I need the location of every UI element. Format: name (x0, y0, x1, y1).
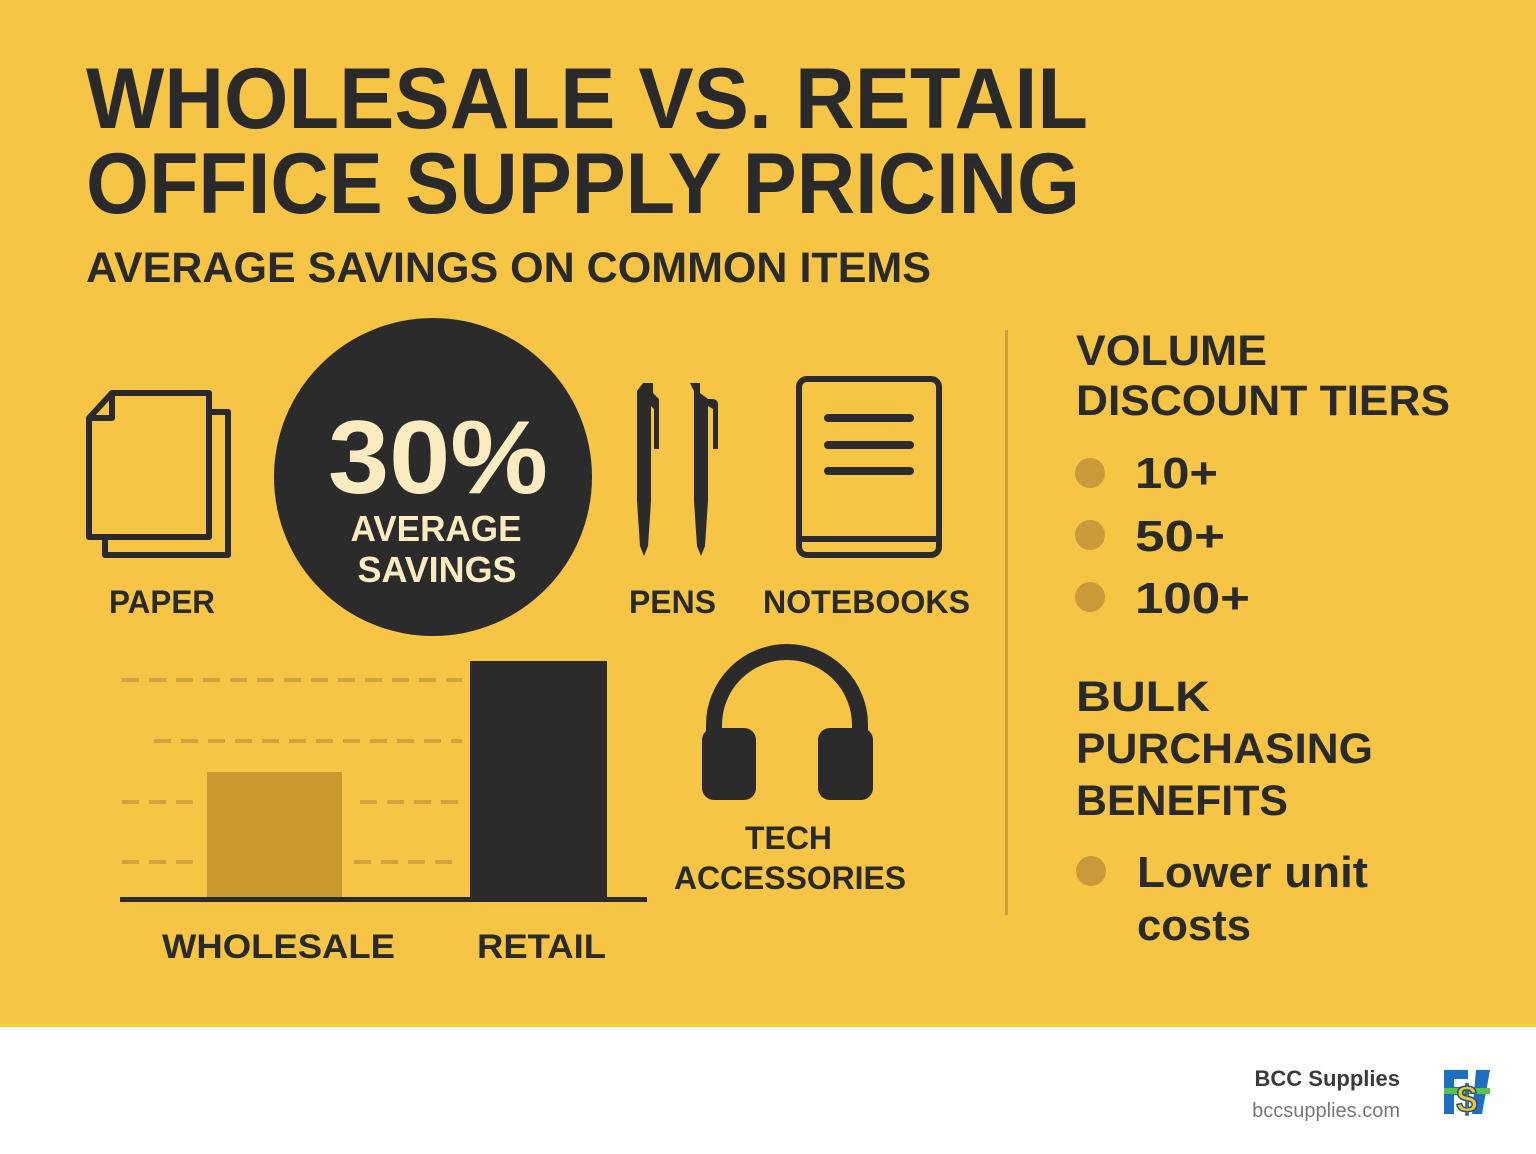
list: tiers: 100+ (1135, 574, 1250, 623)
bar: retail (470, 661, 607, 899)
footer brand: bccsupplies.com (1252, 1100, 1400, 1122)
heading: volume discount tiers (1076, 327, 1450, 425)
icon: pens (637, 383, 718, 556)
icon: notebook (799, 379, 939, 555)
title: OFFICE SUPPLY PRICING (86, 136, 1080, 232)
list: benefits: Lower unit (1137, 848, 1368, 897)
footer brand: BCC Supplies (1255, 1066, 1400, 1091)
label: paper: PAPER (109, 584, 215, 620)
savings circle: AVERAGE (350, 508, 522, 549)
heading: volume discount tiers: VOLUME (1076, 327, 1267, 375)
subtitle: AVERAGE SAVINGS ON COMMON ITEMS (86, 244, 931, 292)
label: notebooks: NOTEBOOKS (763, 584, 970, 620)
list: tiers: 10+ (1135, 449, 1218, 498)
list: benefits: costs (1137, 901, 1251, 950)
savings circle (274, 318, 592, 636)
heading: bulk purchasing benefits: PURCHASING (1076, 725, 1373, 773)
bar chart (120, 661, 647, 966)
heading: volume discount tiers: DISCOUNT TIERS (1076, 377, 1450, 425)
title: WHOLESALE VS. RETAIL (86, 51, 1088, 147)
title (86, 51, 1088, 232)
icon: paper (89, 393, 228, 555)
heading: bulk purchasing benefits (1076, 673, 1373, 825)
label: tech accessories: TECH (745, 820, 832, 856)
footer brand (1252, 1066, 1400, 1122)
label: tech accessories (674, 820, 906, 896)
bar: wholesale (207, 772, 342, 899)
heading: bulk purchasing benefits: BULK (1076, 673, 1210, 721)
icon: logo: $ (1456, 1079, 1478, 1121)
savings circle: SAVINGS (358, 549, 516, 590)
bar chart: RETAIL (477, 928, 606, 966)
list: tiers (1075, 449, 1250, 623)
bar chart: WHOLESALE (162, 928, 395, 966)
label: tech accessories: ACCESSORIES (674, 860, 906, 896)
list: benefits (1076, 848, 1368, 950)
icon: logo (1444, 1070, 1490, 1121)
savings circle: 30% (328, 400, 548, 516)
label: pens: PENS (629, 584, 716, 620)
icon: headphones (702, 652, 873, 800)
list: tiers: 50+ (1135, 512, 1225, 561)
heading: bulk purchasing benefits: BENEFITS (1076, 777, 1288, 825)
